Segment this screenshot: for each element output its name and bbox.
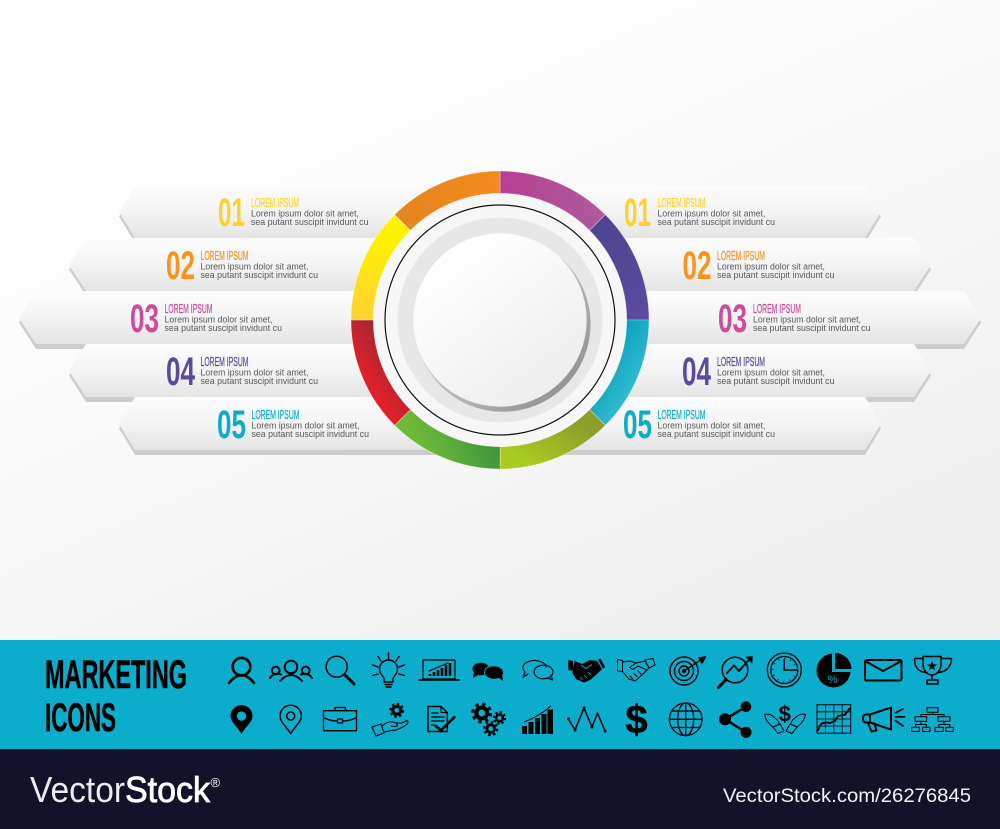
- text block: left 01: [218, 191, 368, 235]
- icon: growth bars: [522, 706, 553, 734]
- text block: left 04: LOREM IPSUM: [200, 355, 248, 369]
- panel: left bar 04: [69, 344, 500, 402]
- text block: left 04: sea putant suscipit invidunt cu: [200, 376, 318, 386]
- icon: dollar: $: [625, 698, 648, 742]
- centre button: [385, 205, 615, 435]
- panel: icon banner: [0, 640, 1000, 749]
- logo: VectorStock: ®: [210, 775, 220, 790]
- text block: left 04: [166, 350, 318, 394]
- text block: left 04: 04: [166, 350, 195, 394]
- text block: right 02: sea putant suscipit invidunt cu: [717, 270, 834, 280]
- background: [0, 0, 1000, 640]
- text block: right 01: sea putant suscipit invidunt cu: [658, 217, 775, 227]
- panel: right bar 04: [500, 344, 931, 402]
- icon: gears: [473, 704, 505, 735]
- icon: document check: [428, 706, 454, 732]
- panel: right bar 03: [500, 291, 981, 349]
- heading: marketing icons: [45, 653, 187, 740]
- logo: VectorStock: Vector: [30, 769, 125, 810]
- text block: left 01: 01: [218, 191, 245, 235]
- icon: hand gear: [372, 704, 408, 736]
- panel: right bar 05: [500, 397, 881, 455]
- text block: right 02: 02: [682, 244, 712, 288]
- text block: right 01: 01: [624, 191, 651, 235]
- text block: left 03: [130, 297, 282, 341]
- icon: trophy: [914, 656, 952, 684]
- text block: right 02: LOREM IPSUM: [717, 249, 765, 263]
- text block: right 02: [682, 244, 834, 288]
- panel: left bar 05: [119, 397, 500, 455]
- icon: megaphone: [863, 708, 904, 732]
- text block: right 01: [624, 191, 775, 235]
- panel: left bar 01: [119, 186, 500, 242]
- text block: right 02: Lorem ipsum dolor sit amet,: [717, 262, 825, 272]
- text block: right 03: LOREM IPSUM: [753, 302, 801, 316]
- text block: left 05: LOREM IPSUM: [252, 408, 300, 422]
- text block: left 05: [217, 403, 369, 447]
- text block: right 05: [623, 403, 775, 447]
- icon: magnifier: [326, 656, 354, 684]
- icon: pin outline: [280, 705, 301, 734]
- icon: hands with dollar: $: [779, 702, 791, 726]
- text block: left 04: Lorem ipsum dolor sit amet,: [200, 368, 308, 378]
- logo: VectorStock: Stock: [125, 769, 211, 810]
- icon: mail: [865, 660, 902, 680]
- icon: percent pie: %: [828, 674, 838, 686]
- text block: right 01: LOREM IPSUM: [658, 196, 706, 210]
- icon: org chart: [912, 708, 953, 732]
- icon: handshake filled: [568, 658, 605, 682]
- text block: right 03: sea putant suscipit invidunt cu: [753, 323, 870, 333]
- text block: left 05: sea putant suscipit invidunt cu: [252, 429, 369, 439]
- icon: clock: [767, 653, 801, 687]
- icon: light bulb: [372, 653, 404, 687]
- text block: right 05: sea putant suscipit invidunt cu: [658, 429, 775, 439]
- icon: chat outline: [523, 660, 553, 680]
- text block: left 05: 05: [217, 403, 246, 447]
- panel: right bar 02: [500, 238, 931, 296]
- icon: line chart zigzag: [567, 706, 606, 732]
- text block: right 03: [718, 297, 870, 341]
- text block: right 03: 03: [718, 297, 747, 341]
- panel: left bar 02: [69, 238, 500, 296]
- text block: left 02: LOREM IPSUM: [200, 249, 248, 263]
- text block: right 04: 04: [682, 350, 711, 394]
- footer bar: [0, 749, 1000, 829]
- icon: person: [229, 658, 254, 683]
- text block: right 04: Lorem ipsum dolor sit amet,: [717, 368, 825, 378]
- text block: left 03: Lorem ipsum dolor sit amet,: [164, 315, 272, 325]
- text block: left 05: Lorem ipsum dolor sit amet,: [252, 421, 360, 431]
- icon: group: [270, 661, 312, 681]
- icon: search growth: [718, 656, 752, 688]
- icon: share: [719, 701, 752, 738]
- text block: right 04: LOREM IPSUM: [717, 355, 765, 369]
- image id url: VectorStock.com/26276845: [723, 785, 971, 807]
- text block: left 03: 03: [130, 297, 159, 341]
- chart: colour ring: [351, 171, 649, 469]
- icon: handshake outline: [618, 658, 655, 681]
- text block: left 01: Lorem ipsum dolor sit amet,: [251, 209, 359, 219]
- icon: briefcase: [324, 708, 356, 731]
- text block: left 02: Lorem ipsum dolor sit amet,: [200, 262, 308, 272]
- heading: marketing icons: MARKETING: [45, 653, 187, 697]
- text block: left 03: sea putant suscipit invidunt cu: [164, 323, 282, 333]
- icon: globe: [669, 703, 702, 736]
- icon: hands with dollar: [764, 702, 806, 734]
- icon: grid chart: [817, 705, 851, 733]
- text block: right 04: [682, 350, 834, 394]
- text block: right 04: sea putant suscipit invidunt cu: [717, 376, 834, 386]
- text block: right 03: Lorem ipsum dolor sit amet,: [753, 315, 861, 325]
- text block: right 05: LOREM IPSUM: [658, 408, 706, 422]
- icon: target: [670, 657, 706, 685]
- text block: left 02: sea putant suscipit invidunt cu: [200, 270, 318, 280]
- text block: left 02: [166, 244, 318, 288]
- icon: pin filled: [230, 705, 252, 734]
- logo: VectorStock: [30, 769, 220, 810]
- icon: chat filled: [472, 663, 504, 681]
- icon: laptop chart: [419, 660, 459, 680]
- text block: left 01: LOREM IPSUM: [251, 196, 299, 210]
- text block: left 01: sea putant suscipit invidunt cu: [251, 217, 368, 227]
- text block: left 03: LOREM IPSUM: [164, 302, 212, 316]
- panel: left bar 03: [19, 291, 500, 349]
- text block: right 05: Lorem ipsum dolor sit amet,: [658, 421, 766, 431]
- text block: right 01: Lorem ipsum dolor sit amet,: [658, 209, 766, 219]
- text block: left 02: 02: [166, 244, 195, 288]
- icon: percent pie: [817, 653, 852, 687]
- text block: right 05: 05: [623, 403, 652, 447]
- heading: marketing icons: ICONS: [45, 696, 116, 740]
- panel: right bar 01: [500, 186, 881, 242]
